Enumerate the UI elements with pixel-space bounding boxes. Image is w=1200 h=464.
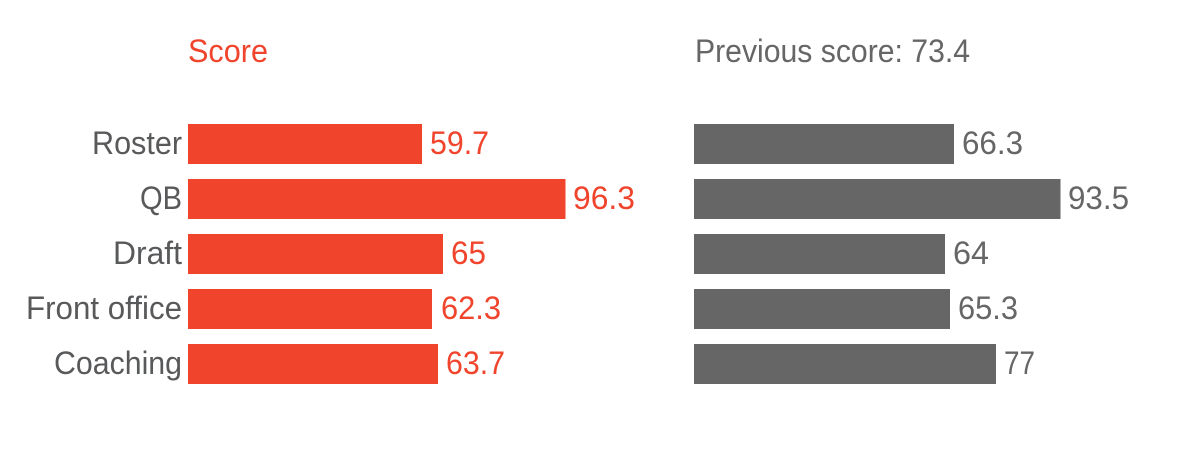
panel: score chart — [26, 33, 635, 384]
row: Draft: 65 — [451, 235, 486, 271]
row: QB: QB — [140, 180, 182, 216]
row: Roster: Roster — [92, 125, 182, 161]
row: QB previous — [694, 179, 1129, 219]
heading: Previous score: Previous score: 73.4 — [695, 33, 970, 69]
panel: previous score chart — [694, 33, 1129, 384]
row: Front office: 62.3 — [441, 290, 501, 326]
row: QB previous: 93.5 — [1068, 180, 1129, 216]
row: Roster previous — [694, 124, 1023, 164]
row: Coaching: 63.7 — [446, 345, 505, 381]
heading: Score: Score — [188, 33, 268, 69]
row: Draft — [113, 234, 486, 274]
row: Front office previous: 65.3 — [958, 290, 1018, 326]
row: QB — [140, 179, 635, 219]
row: Coaching previous — [694, 344, 1035, 384]
row: Draft previous: 64 — [953, 235, 989, 271]
row: Roster: 59.7 — [430, 125, 489, 161]
row: Coaching previous: 77 — [1004, 345, 1035, 381]
row: Roster previous: 66.3 — [962, 125, 1023, 161]
row: Front office previous — [694, 289, 1018, 329]
row: Front office — [26, 289, 501, 329]
row: Coaching: Coaching — [54, 345, 182, 381]
row: Roster — [92, 124, 489, 164]
row: Front office: Front office — [26, 290, 182, 326]
row: Draft: Draft — [113, 235, 182, 271]
row: QB: 96.3 — [573, 180, 635, 216]
row: Coaching — [54, 344, 505, 384]
row: Draft previous — [694, 234, 989, 274]
